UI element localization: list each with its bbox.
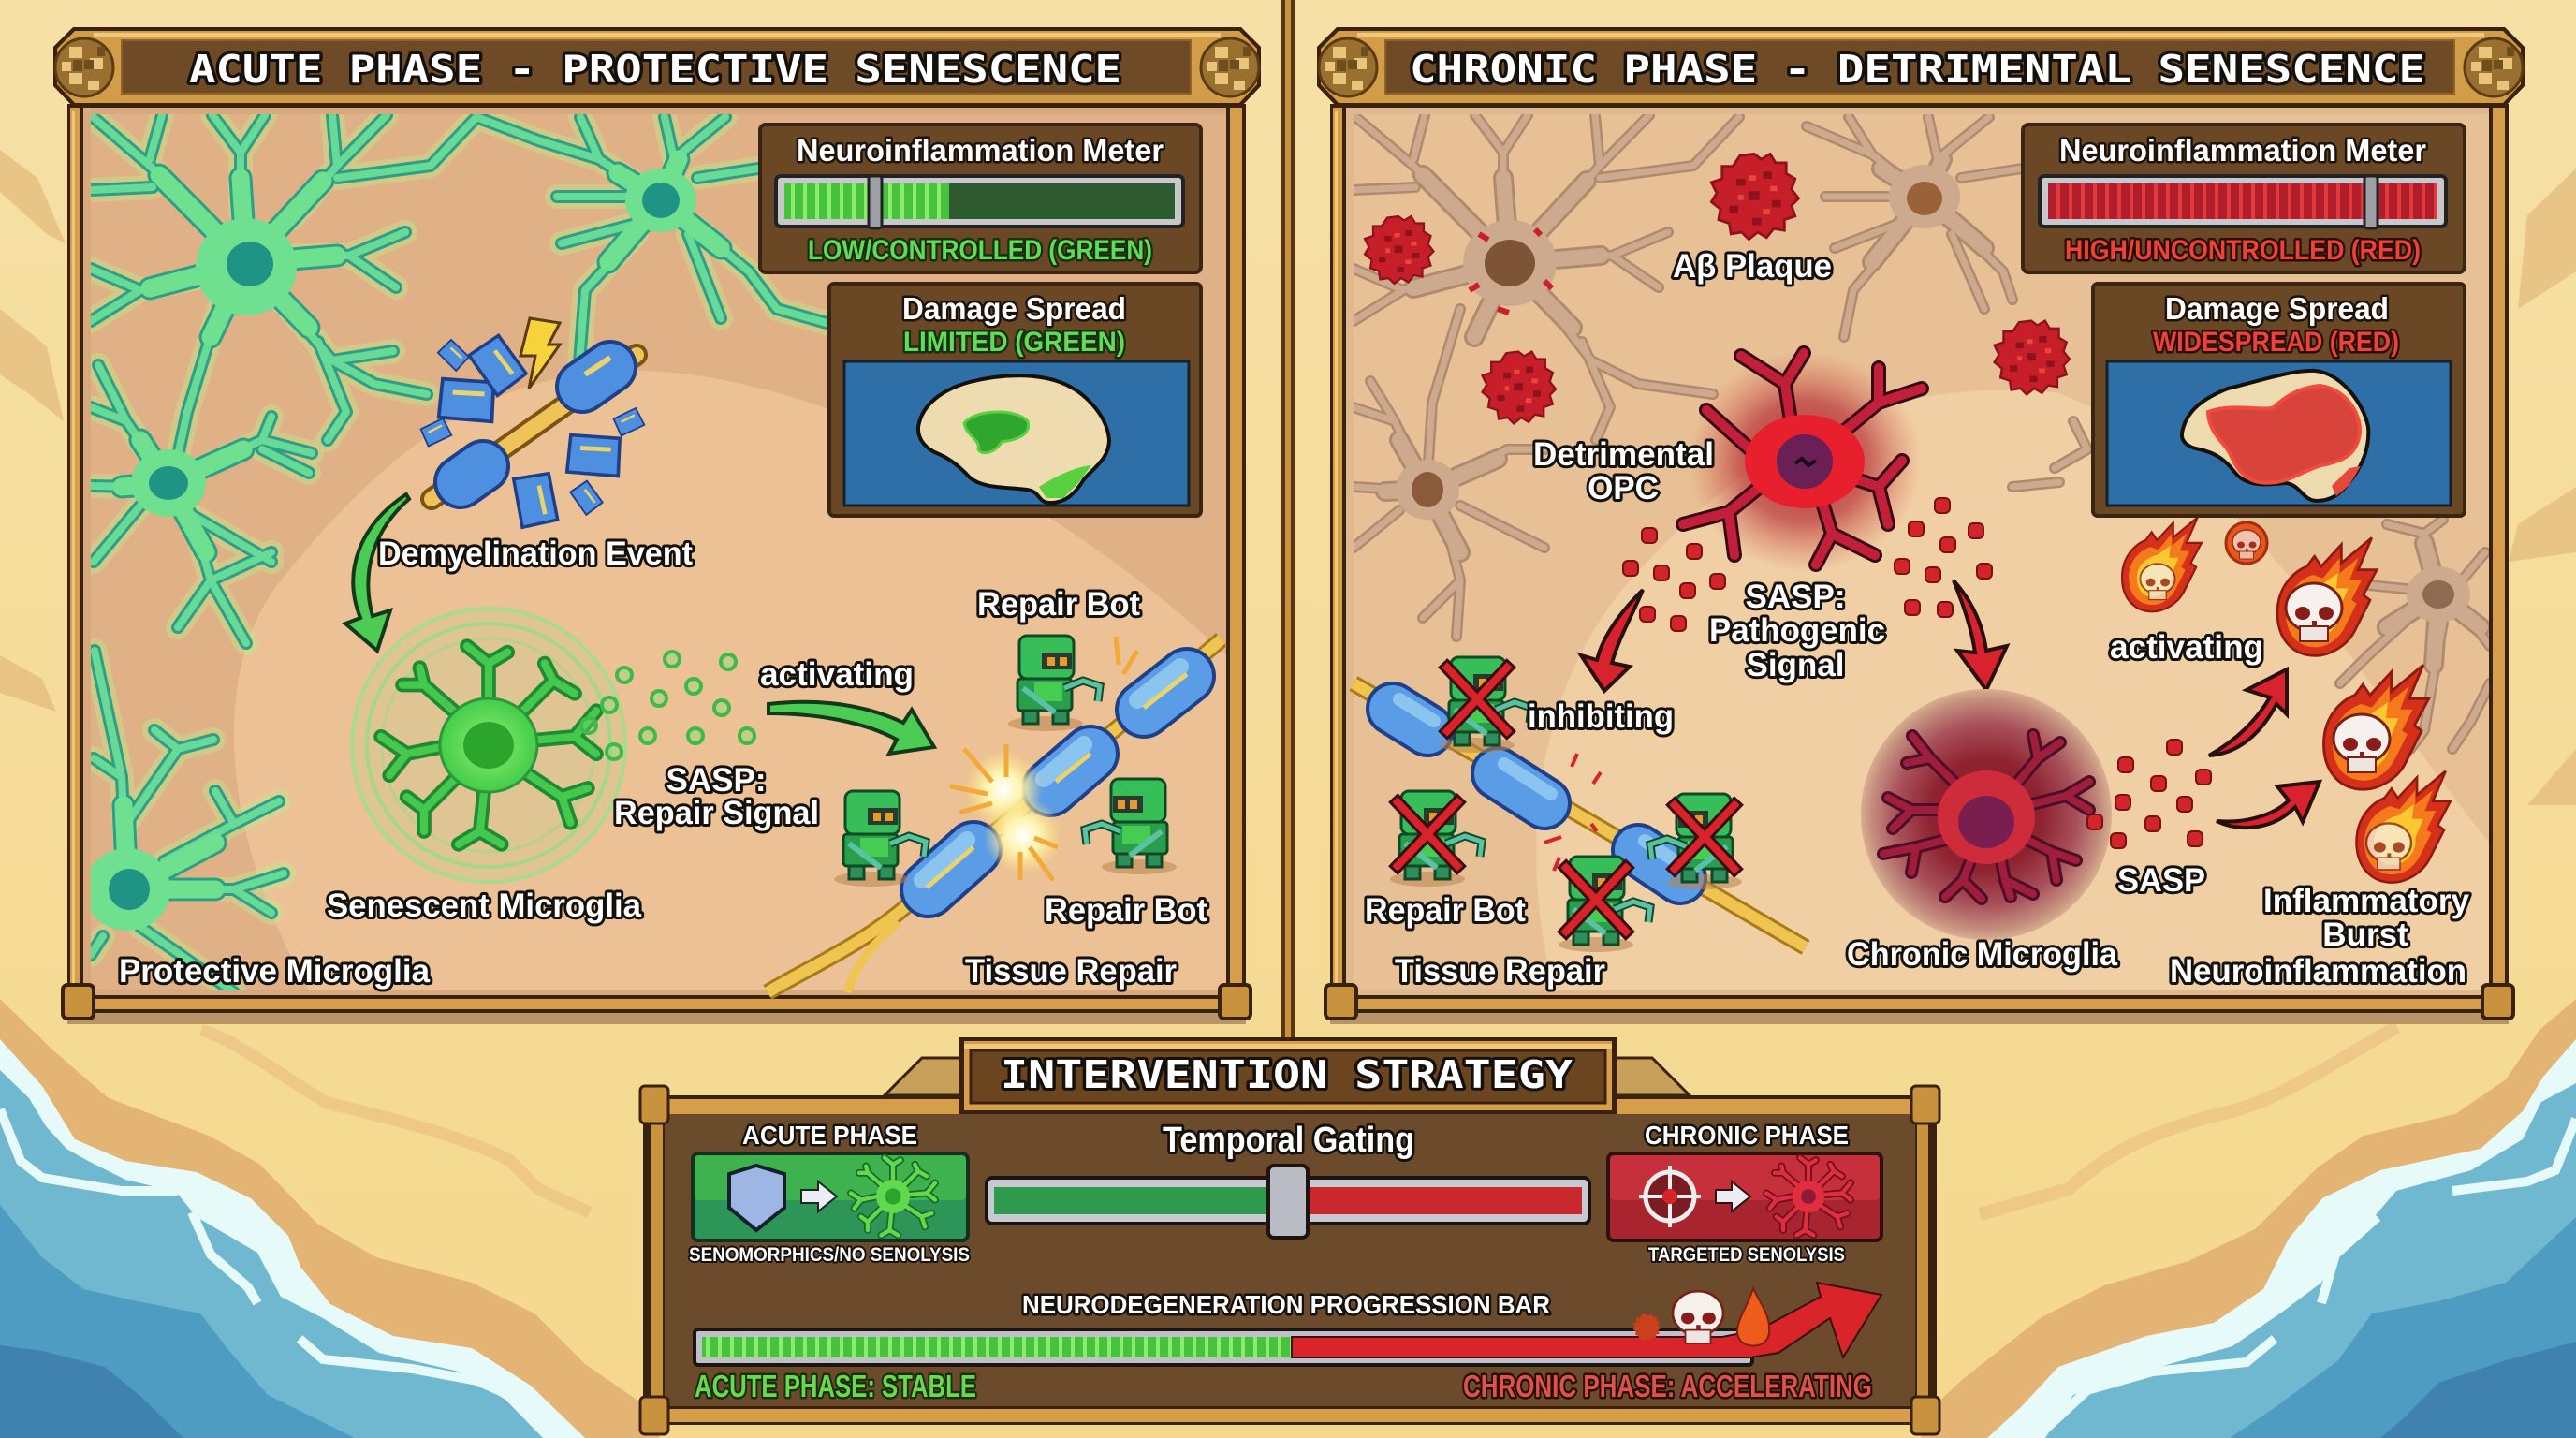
chronic labels: Burst — [2322, 917, 2408, 953]
neuroinflammation meter: low: Neuroinflammation Meter — [797, 133, 1164, 168]
neuroinflammation meter: high: HIGH/UNCONTROLLED (RED) — [2065, 235, 2421, 266]
icon: mini microglia — [851, 1158, 935, 1235]
damage spread map: widespread: Damage Spread — [2165, 291, 2389, 326]
arrow: to chronic microglia — [1954, 580, 2007, 690]
acute labels: Repair Bot — [977, 586, 1140, 623]
icon: demyelination event — [419, 318, 646, 530]
neurodegeneration progression bar: NEURODEGENERATION PROGRESSION BAR — [1022, 1290, 1550, 1319]
neurodegeneration progression bar: CHRONIC PHASE: ACCELERATING — [1463, 1369, 1872, 1403]
arrow: activating — [768, 702, 934, 754]
acute labels: Repair Bot — [1045, 892, 1208, 929]
neuroinflammation meter: low: LOW/CONTROLLED (GREEN) — [808, 235, 1152, 266]
chronic phase treatment — [1608, 1121, 1881, 1266]
panel: intervention strategy — [640, 1037, 1939, 1434]
icon: mini senescent cell — [1766, 1158, 1851, 1235]
chronic header banner — [1317, 27, 2525, 107]
senescent microglia — [352, 609, 625, 882]
damage spread map: limited — [829, 284, 1201, 516]
arrow: demyelination to microglia — [345, 494, 409, 651]
acute labels: Demyelination Event — [378, 536, 693, 572]
intervention header — [959, 1037, 1617, 1114]
acute labels: SASP: — [666, 762, 766, 799]
tissue repair myelin — [768, 637, 1222, 992]
SASP pathogenic signal dots — [1623, 498, 1992, 631]
panel: chronic phase — [1317, 27, 2525, 1024]
chronic phase treatment: TARGETED SENOLYSIS — [1648, 1244, 1845, 1266]
icon: repair bots — [834, 636, 1177, 887]
chronic labels: Pathogenic — [1709, 612, 1885, 649]
chronic labels: inhibiting — [1528, 698, 1674, 735]
SASP dots: chronic microglia — [2087, 740, 2211, 848]
chronic labels: Chronic Microglia — [1847, 936, 2118, 973]
damage spread map: limited: Damage Spread — [902, 291, 1126, 326]
temporal gating slider — [987, 1121, 1589, 1238]
neuroinflammation meter: high: Neuroinflammation Meter — [2059, 133, 2426, 168]
chronic header banner: CHRONIC PHASE - DETRIMENTAL SENESCENCE — [1410, 47, 2425, 92]
acute labels: Tissue Repair — [965, 953, 1177, 990]
inhibited tissue repair — [1354, 683, 1806, 947]
acute header banner: ACUTE PHASE - PROTECTIVE SENESCENCE — [189, 47, 1121, 92]
chronic labels: Detrimental — [1533, 436, 1714, 473]
icon: inflammatory burst fire skulls — [2122, 518, 2451, 883]
chronic labels: activating — [2110, 629, 2263, 666]
acute labels: activating — [760, 656, 914, 693]
degenerating brown neurons — [1354, 115, 2490, 749]
chronic phase treatment: CHRONIC PHASE — [1645, 1121, 1849, 1150]
chronic labels: Tissue Repair — [1395, 953, 1605, 990]
neuroinflammation meter: low — [760, 125, 1201, 272]
protective microglia neurons — [84, 115, 827, 992]
chronic labels: Neuroinflammation — [2170, 953, 2466, 990]
icon: shield — [729, 1166, 784, 1230]
arrow: activating upper — [2209, 669, 2287, 756]
neuroinflammation meter: high — [2023, 125, 2465, 272]
acute labels: Protective Microglia — [119, 953, 431, 990]
intervention frame — [640, 1058, 1939, 1434]
chronic labels: SASP: — [1746, 579, 1845, 615]
icon: skull — [1673, 1291, 1723, 1343]
chronic panel frame — [1325, 104, 2513, 1024]
chronic labels: Repair Bot — [1365, 892, 1526, 929]
chronic labels: SASP — [2117, 862, 2205, 899]
acute labels: Repair Signal — [614, 795, 819, 831]
centre divider — [1281, 0, 1295, 1041]
intervention header: INTERVENTION STRATEGY — [1001, 1052, 1573, 1097]
icon: flame — [1737, 1288, 1769, 1346]
chronic labels: OPC — [1588, 470, 1659, 506]
arrow: inhibiting — [1581, 590, 1643, 691]
acute header banner — [53, 27, 1261, 107]
acute labels: Senescent Microglia — [327, 888, 642, 924]
damage spread map: widespread — [2093, 284, 2465, 516]
arrow: activating lower — [2217, 782, 2320, 828]
icon: target — [1639, 1166, 1701, 1227]
chronic labels — [1365, 248, 2470, 990]
icon: white arrow — [1716, 1181, 1750, 1211]
icon: disabled repair bots — [1390, 657, 1742, 952]
acute phase treatment: SENOMORPHICS/NO SENOLYSIS — [689, 1244, 970, 1266]
temporal gating slider: Temporal Gating — [1163, 1121, 1414, 1160]
acute labels — [119, 536, 1208, 990]
acute phase treatment — [689, 1121, 970, 1266]
chronic microglia — [1861, 689, 2112, 940]
damage spread map: widespread: WIDESPREAD (RED) — [2153, 327, 2399, 358]
icon: A-beta plaques — [1365, 154, 2070, 423]
damage spread map: limited: LIMITED (GREEN) — [903, 327, 1125, 358]
icon: white arrow — [801, 1181, 837, 1211]
chronic labels: Aβ Plaque — [1673, 248, 1832, 285]
acute panel frame — [63, 104, 1251, 1024]
neurodegeneration progression bar: ACUTE PHASE: STABLE — [695, 1369, 976, 1403]
chronic labels: Signal — [1746, 647, 1845, 683]
SASP repair signal dots — [581, 652, 754, 759]
detrimental OPC — [1683, 351, 1922, 572]
neurodegeneration progression bar — [695, 1283, 1881, 1403]
acute phase treatment: ACUTE PHASE — [742, 1121, 917, 1150]
chronic labels: Inflammatory — [2263, 883, 2470, 919]
icon: plaque — [1633, 1314, 1661, 1341]
panel: acute phase — [53, 27, 1261, 1024]
